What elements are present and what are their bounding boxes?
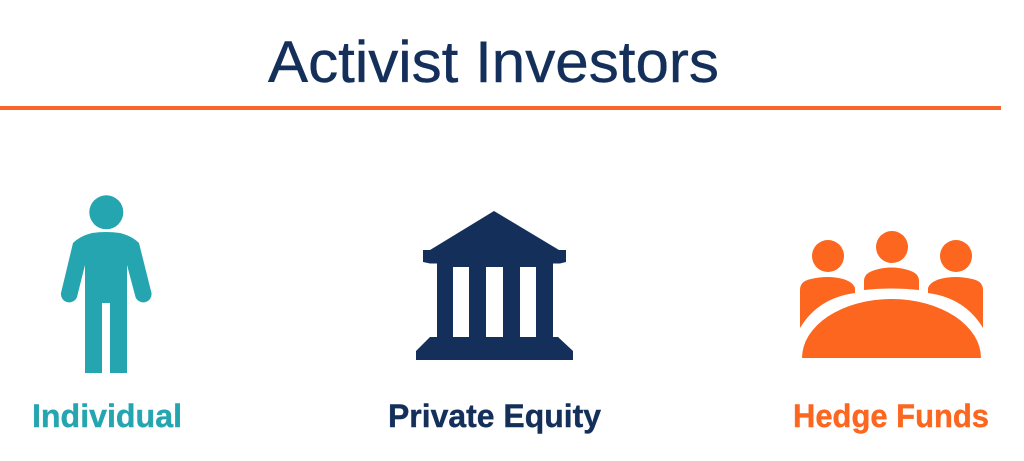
- icon: bank building: [416, 211, 573, 360]
- label: individual: Individual: [32, 398, 182, 434]
- panel: individual: [32, 195, 182, 434]
- label: hedge funds: Hedge Funds: [793, 398, 989, 434]
- panel: hedge funds: [793, 231, 989, 434]
- label: private equity: Private Equity: [388, 398, 601, 434]
- icon: person: [61, 195, 152, 373]
- panel: private equity: [388, 211, 601, 434]
- title: Activist Investors: [268, 30, 719, 95]
- icon: meeting table group: [800, 231, 983, 358]
- header rule: [0, 106, 1001, 110]
